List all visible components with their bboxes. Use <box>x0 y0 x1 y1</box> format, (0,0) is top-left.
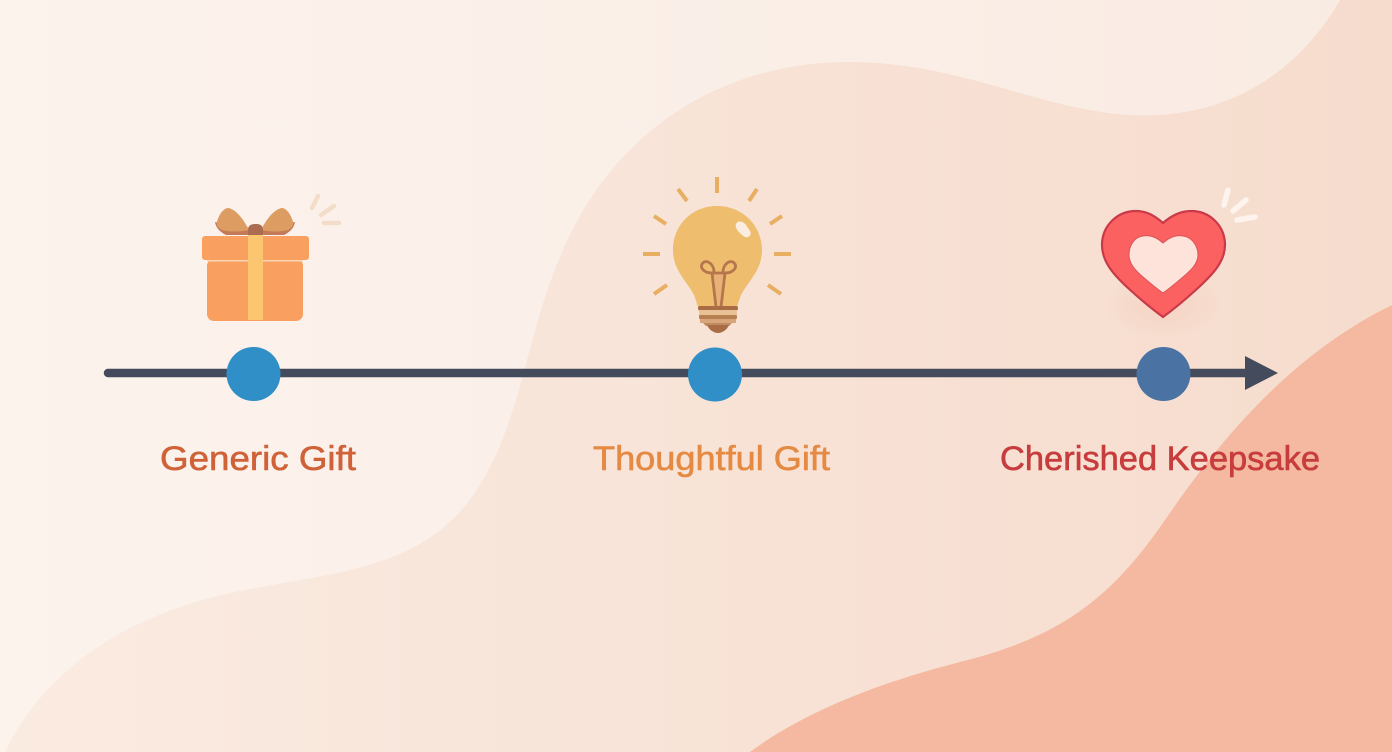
node: cherished keepsake <box>1136 347 1190 401</box>
label: thoughtful gift: Thoughtful Gift <box>593 440 831 478</box>
background wave: front <box>750 305 1392 752</box>
node: thoughtful gift <box>688 348 742 402</box>
heart glow <box>1105 271 1221 339</box>
label: generic gift: Generic Gift <box>160 440 357 478</box>
icon: heart <box>1102 190 1255 317</box>
timeline arrow <box>108 356 1278 390</box>
label: cherished keepsake: Cherished Keepsake <box>1000 440 1320 478</box>
icon: light bulb <box>643 177 791 333</box>
icon: gift box <box>202 196 339 321</box>
node: generic gift <box>226 347 280 401</box>
